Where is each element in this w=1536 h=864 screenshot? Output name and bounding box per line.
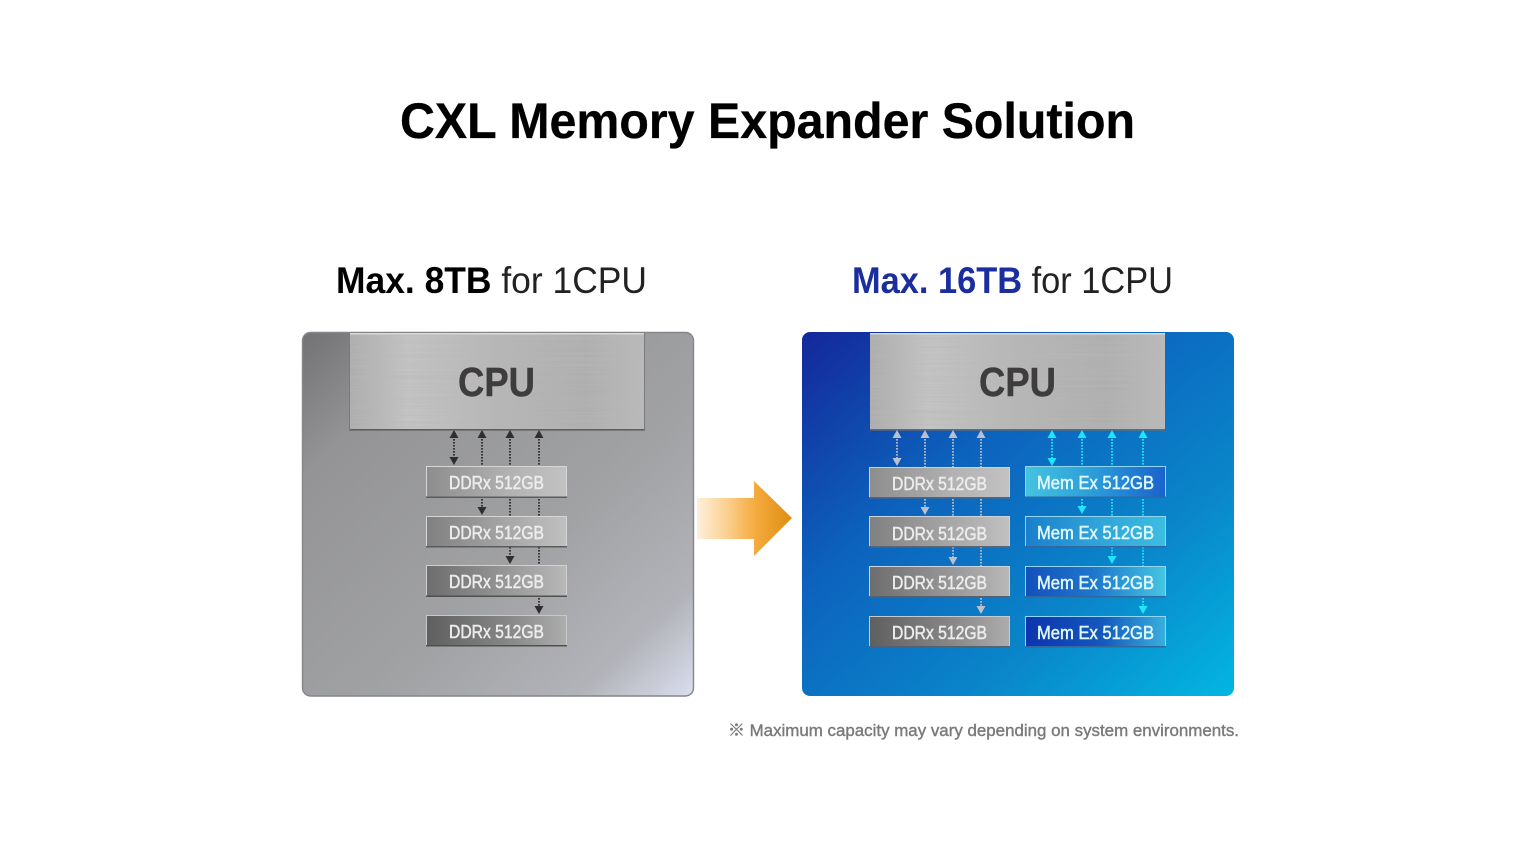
DDR connection arrows right <box>897 436 981 609</box>
DDR module right 4: DDRx 512GB <box>892 623 987 643</box>
panel: CXL expanded configuration <box>802 332 1234 696</box>
DDR module right 2: DDRx 512GB <box>892 524 987 544</box>
memory module left 1: DDRx 512GB <box>449 473 544 493</box>
DDR module right 1 <box>869 468 1010 498</box>
memory module left 3 <box>426 566 567 597</box>
memory module left 4 <box>426 616 567 646</box>
Mem Ex module 4: Mem Ex 512GB <box>1037 623 1154 643</box>
cpu block right: CPU <box>979 359 1056 405</box>
DDR arrowheads right <box>892 430 986 614</box>
memory module left 4: DDRx 512GB <box>449 622 544 642</box>
Mem Ex module 1: Mem Ex 512GB <box>1037 473 1154 493</box>
DDR module right 4 <box>869 616 1010 648</box>
memory module left 3: DDRx 512GB <box>449 572 544 592</box>
heading: right capacity: Max. 16TB for 1CPU <box>852 260 1173 301</box>
Mem Ex connection arrows <box>1052 436 1143 609</box>
memory module left 1 <box>426 466 567 498</box>
memory module left 2: DDRx 512GB <box>449 523 544 543</box>
cpu block left <box>349 333 645 431</box>
Mem Ex module 3: Mem Ex 512GB <box>1037 573 1154 593</box>
Mem Ex module 2 <box>1025 516 1166 548</box>
cpu block right <box>870 333 1165 431</box>
Mem Ex module 3 <box>1025 566 1166 598</box>
heading: left capacity: Max. 8TB for 1CPU <box>336 260 647 301</box>
Mem Ex module 1 <box>1025 466 1166 498</box>
Mem Ex module 4 <box>1025 616 1166 648</box>
DDR module right 2 <box>869 516 1010 548</box>
footnote: ※ Maximum capacity may vary depending on system environments. <box>728 721 1239 740</box>
arrowheads left <box>450 430 544 614</box>
panel: current DDR configuration <box>302 332 694 696</box>
Mem Ex module 2: Mem Ex 512GB <box>1037 523 1154 543</box>
Mem Ex arrowheads <box>1048 430 1148 614</box>
arrow: transition to expanded configuration <box>697 481 792 556</box>
title: CXL Memory Expander Solution <box>400 93 1135 149</box>
DDR module right 3: DDRx 512GB <box>892 573 987 593</box>
cpu block left: CPU <box>458 359 535 405</box>
DDR module right 3 <box>869 566 1010 598</box>
DDR module right 1: DDRx 512GB <box>892 474 987 494</box>
connection arrows left <box>454 436 539 609</box>
memory module left 2 <box>426 516 567 548</box>
